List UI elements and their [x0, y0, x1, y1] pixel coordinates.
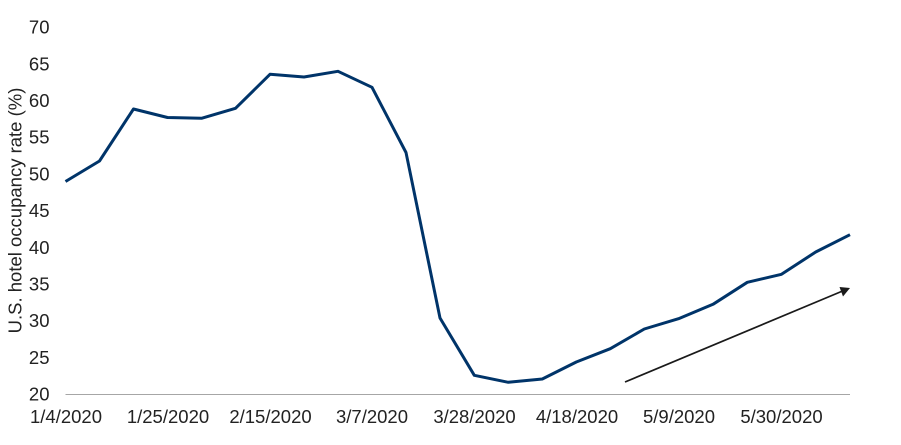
x-axis tick labels: 3/28/2020 [433, 406, 516, 427]
x-axis tick labels: 2/15/2020 [229, 406, 312, 427]
occupancy rate data line [66, 71, 850, 382]
y-axis tick labels: 30 [29, 310, 50, 331]
y-axis tick labels: 60 [29, 90, 50, 111]
x-axis tick labels: 5/9/2020 [643, 406, 715, 427]
y-axis tick labels: 20 [29, 384, 50, 405]
y-axis tick labels: 70 [29, 17, 50, 38]
recovery trend arrow [625, 287, 850, 382]
y-axis tick labels [29, 17, 50, 405]
y-axis tick labels: 25 [29, 347, 50, 368]
x-axis tick labels: 1/4/2020 [30, 406, 102, 427]
y-axis title: U.S. hotel occupancy rate (%) [4, 88, 26, 333]
x-axis tick labels: 4/18/2020 [536, 406, 618, 427]
y-axis tick labels: 55 [29, 127, 50, 148]
x-axis tick labels: 5/30/2020 [740, 406, 823, 427]
y-axis tick labels: 40 [29, 237, 50, 258]
x-axis tick labels [30, 406, 823, 427]
x-axis tick labels: 3/7/2020 [336, 406, 408, 427]
x-axis line [66, 394, 850, 396]
y-axis tick labels: 65 [29, 53, 50, 74]
y-axis tick labels: 50 [29, 163, 50, 184]
x-axis tick labels: 1/25/2020 [127, 406, 209, 427]
y-axis tick labels: 35 [29, 274, 50, 294]
y-axis tick labels: 45 [29, 200, 50, 221]
